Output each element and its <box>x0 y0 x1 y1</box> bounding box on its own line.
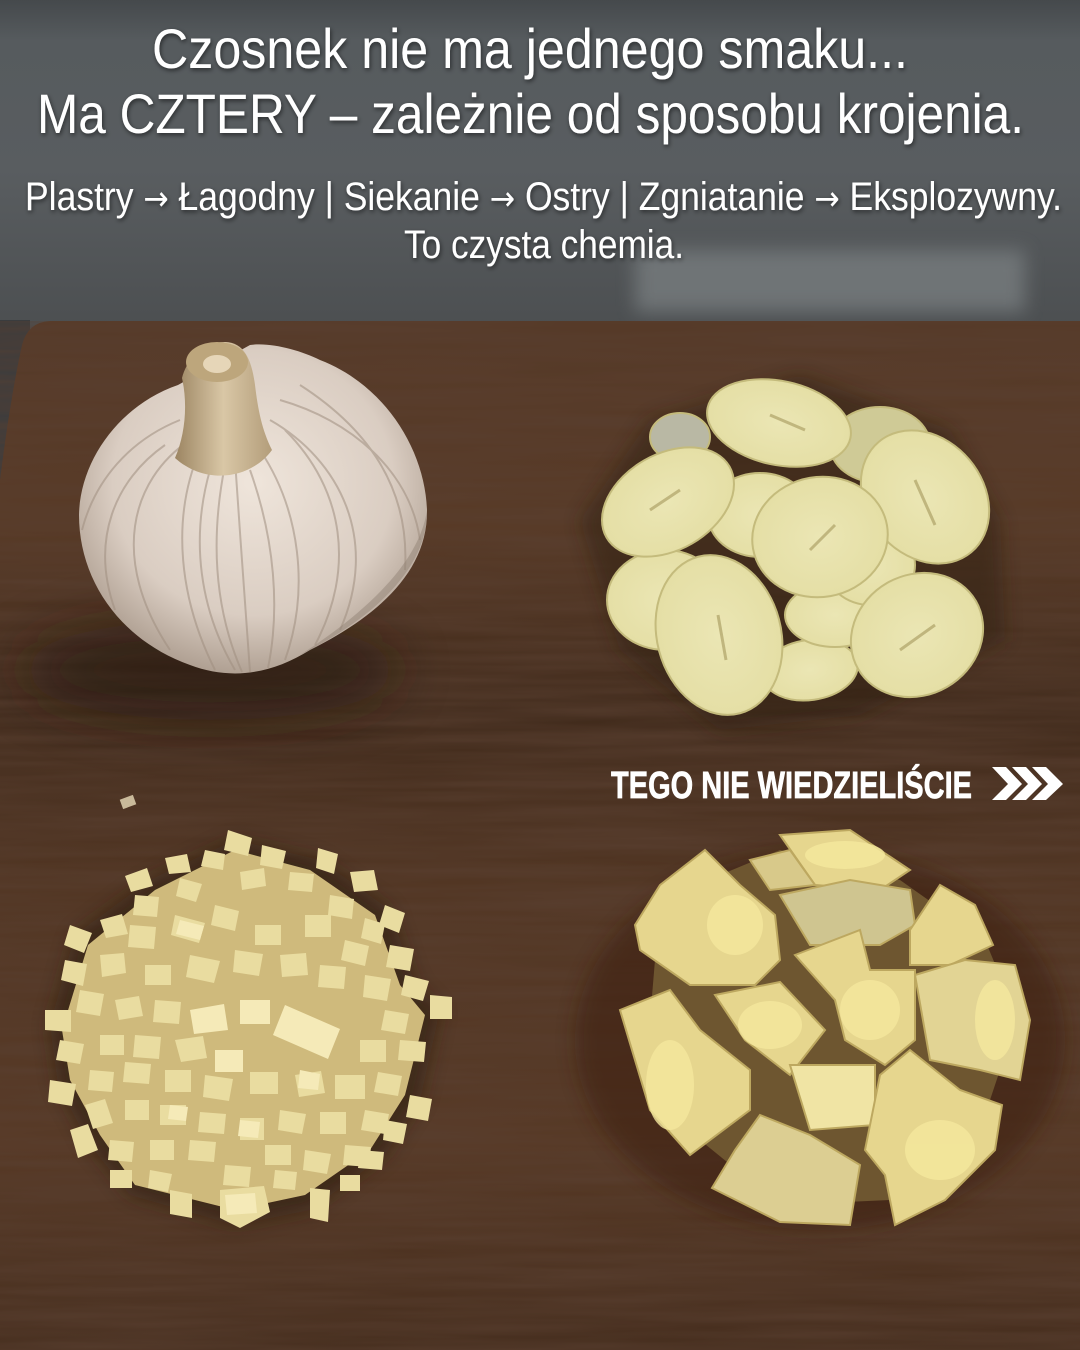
subtitle <box>25 175 1062 267</box>
crushed garlic pile <box>575 830 1065 1230</box>
subtitle: Plastry → Łagodny | Siekanie → Ostry | Zgniatanie → Eksplozywny. <box>25 175 1062 219</box>
wooden cutting board <box>0 321 1080 1350</box>
title: Czosnek nie ma jednego smaku... <box>152 17 908 80</box>
minced garlic pile <box>45 795 452 1228</box>
label: tego nie wiedzieliście: TEGO NIE WIEDZIELIŚCIE <box>611 763 972 807</box>
subtitle: To czysta chemia. <box>404 223 684 267</box>
stray garlic crumb <box>120 795 136 809</box>
icon: triple chevron arrow <box>992 767 1063 800</box>
garlic stem <box>175 342 272 476</box>
title <box>37 17 1024 145</box>
sliced garlic pile <box>580 367 1016 730</box>
whole garlic bulb <box>79 342 427 673</box>
background: stone countertop <box>0 0 1080 520</box>
